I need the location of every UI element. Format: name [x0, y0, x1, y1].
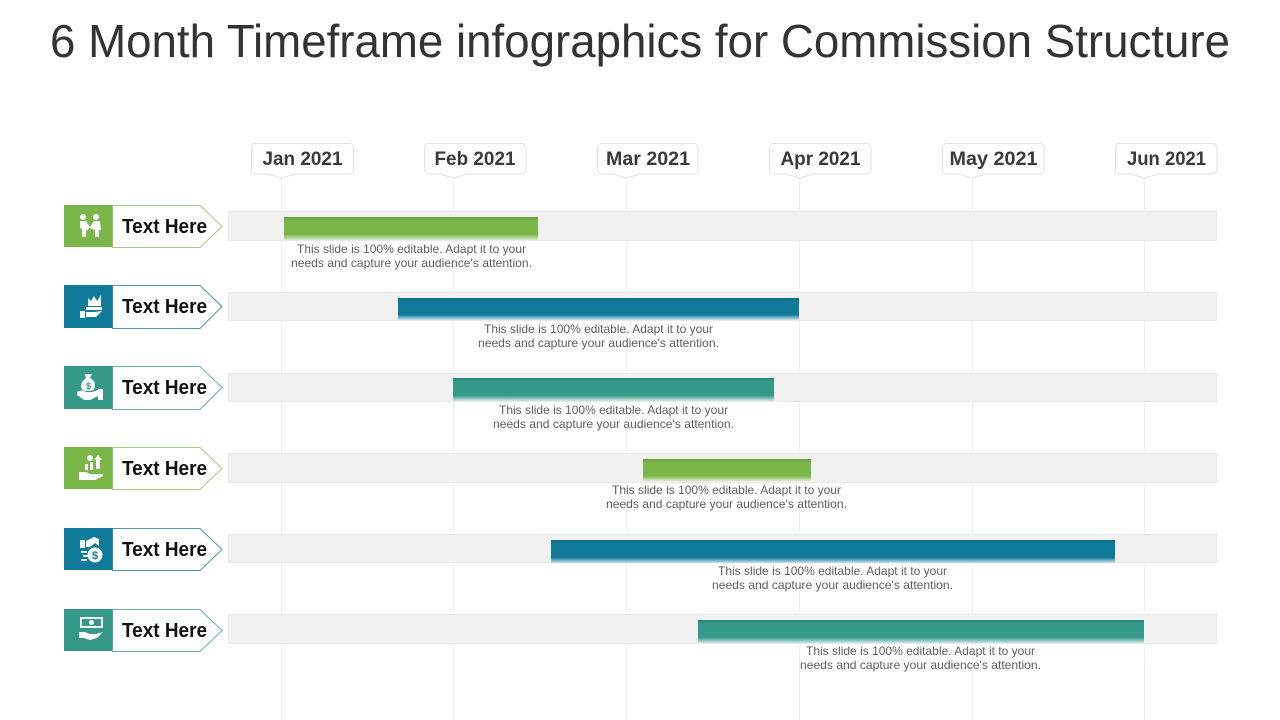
row 3 bar — [453, 378, 774, 401]
month label: Feb 2021: Feb 2021 — [434, 149, 516, 170]
row 1 timeline — [64, 205, 1216, 270]
month label: May 2021: May 2021 — [950, 149, 1038, 170]
icon: hand passing coin: $ — [92, 550, 98, 562]
row 3 description: needs and capture your audience's attention. — [493, 417, 734, 431]
row 4 label tag — [64, 447, 222, 490]
icon: money bag on hand: $ — [86, 381, 91, 391]
month label: Jan 2021: Jan 2021 — [262, 149, 343, 170]
row 5 label tag — [64, 528, 222, 570]
month label: Mar 2021: Mar 2021 — [606, 149, 690, 170]
row 4 track — [228, 454, 1216, 482]
row 5 timeline — [64, 528, 1216, 592]
row 5 description: needs and capture your audience's attention. — [712, 578, 953, 592]
row 5 description — [712, 564, 953, 592]
row 2 track — [228, 292, 1216, 320]
row 3 label tag: Text Here — [122, 377, 207, 399]
row 6 description: This slide is 100% editable. Adapt it to your — [806, 644, 1035, 658]
icon: hand holding crown — [80, 295, 102, 318]
row 5 description: This slide is 100% editable. Adapt it to your — [718, 564, 947, 578]
icon: two people holding hands — [80, 214, 101, 237]
row 6 description — [800, 644, 1041, 672]
month label: Jun 2021: Jun 2021 — [1127, 149, 1206, 170]
row 1 description — [291, 242, 532, 270]
row 6 bar — [698, 620, 1144, 643]
row 1 description: needs and capture your audience's attention. — [291, 256, 532, 270]
row 3 timeline — [64, 366, 1216, 431]
month label: Mar 2021 — [598, 144, 698, 178]
row 5 bar — [551, 540, 1115, 563]
row 6 label tag: Text Here — [122, 620, 207, 642]
row 5 track — [228, 534, 1216, 562]
month label: Jan 2021 — [252, 144, 354, 178]
row 6 description: needs and capture your audience's attention. — [800, 658, 1041, 672]
row 2 label tag: Text Here — [122, 296, 207, 318]
month label: Jun 2021 — [1116, 144, 1217, 178]
row 4 description: This slide is 100% editable. Adapt it to your — [612, 483, 841, 497]
month label: Apr 2021: Apr 2021 — [780, 149, 861, 170]
row 4 description: needs and capture your audience's attention. — [606, 497, 847, 511]
row 4 timeline — [64, 447, 1216, 511]
row 1 track — [228, 212, 1216, 240]
row 2 description: needs and capture your audience's attention. — [478, 336, 719, 350]
icon: hand passing coin — [80, 537, 102, 562]
row 4 bar — [643, 459, 811, 481]
row 2 timeline — [64, 285, 1216, 350]
row 2 label tag — [64, 285, 222, 328]
month label: Feb 2021 — [424, 144, 526, 178]
row 2 bar — [398, 298, 799, 320]
title: 6 Month Timeframe infographics for Commission Structure — [50, 15, 1230, 67]
icon: growth chart on hand — [79, 455, 103, 480]
row 3 track — [228, 374, 1216, 402]
row 4 description — [606, 483, 847, 511]
month label: May 2021 — [942, 144, 1044, 178]
icon: banknote over hand — [79, 617, 103, 640]
row 3 label tag — [64, 366, 222, 410]
row 3 description — [493, 403, 734, 431]
row 6 track — [228, 614, 1216, 644]
row 1 label tag: Text Here — [122, 216, 207, 238]
icon: money bag on hand — [77, 374, 103, 400]
row 5 label tag: Text Here — [122, 539, 207, 561]
row 2 description: This slide is 100% editable. Adapt it to your — [484, 322, 713, 336]
row 1 bar — [284, 217, 538, 240]
row 6 timeline — [64, 609, 1216, 672]
row 1 description: This slide is 100% editable. Adapt it to your — [297, 242, 526, 256]
month header row — [252, 144, 1217, 178]
row 1 label tag — [64, 205, 222, 248]
row 4 label tag: Text Here — [122, 458, 207, 480]
row 3 description: This slide is 100% editable. Adapt it to your — [499, 403, 728, 417]
row 6 label tag — [64, 609, 222, 652]
month label: Apr 2021 — [770, 144, 871, 178]
row 2 description — [478, 322, 719, 350]
